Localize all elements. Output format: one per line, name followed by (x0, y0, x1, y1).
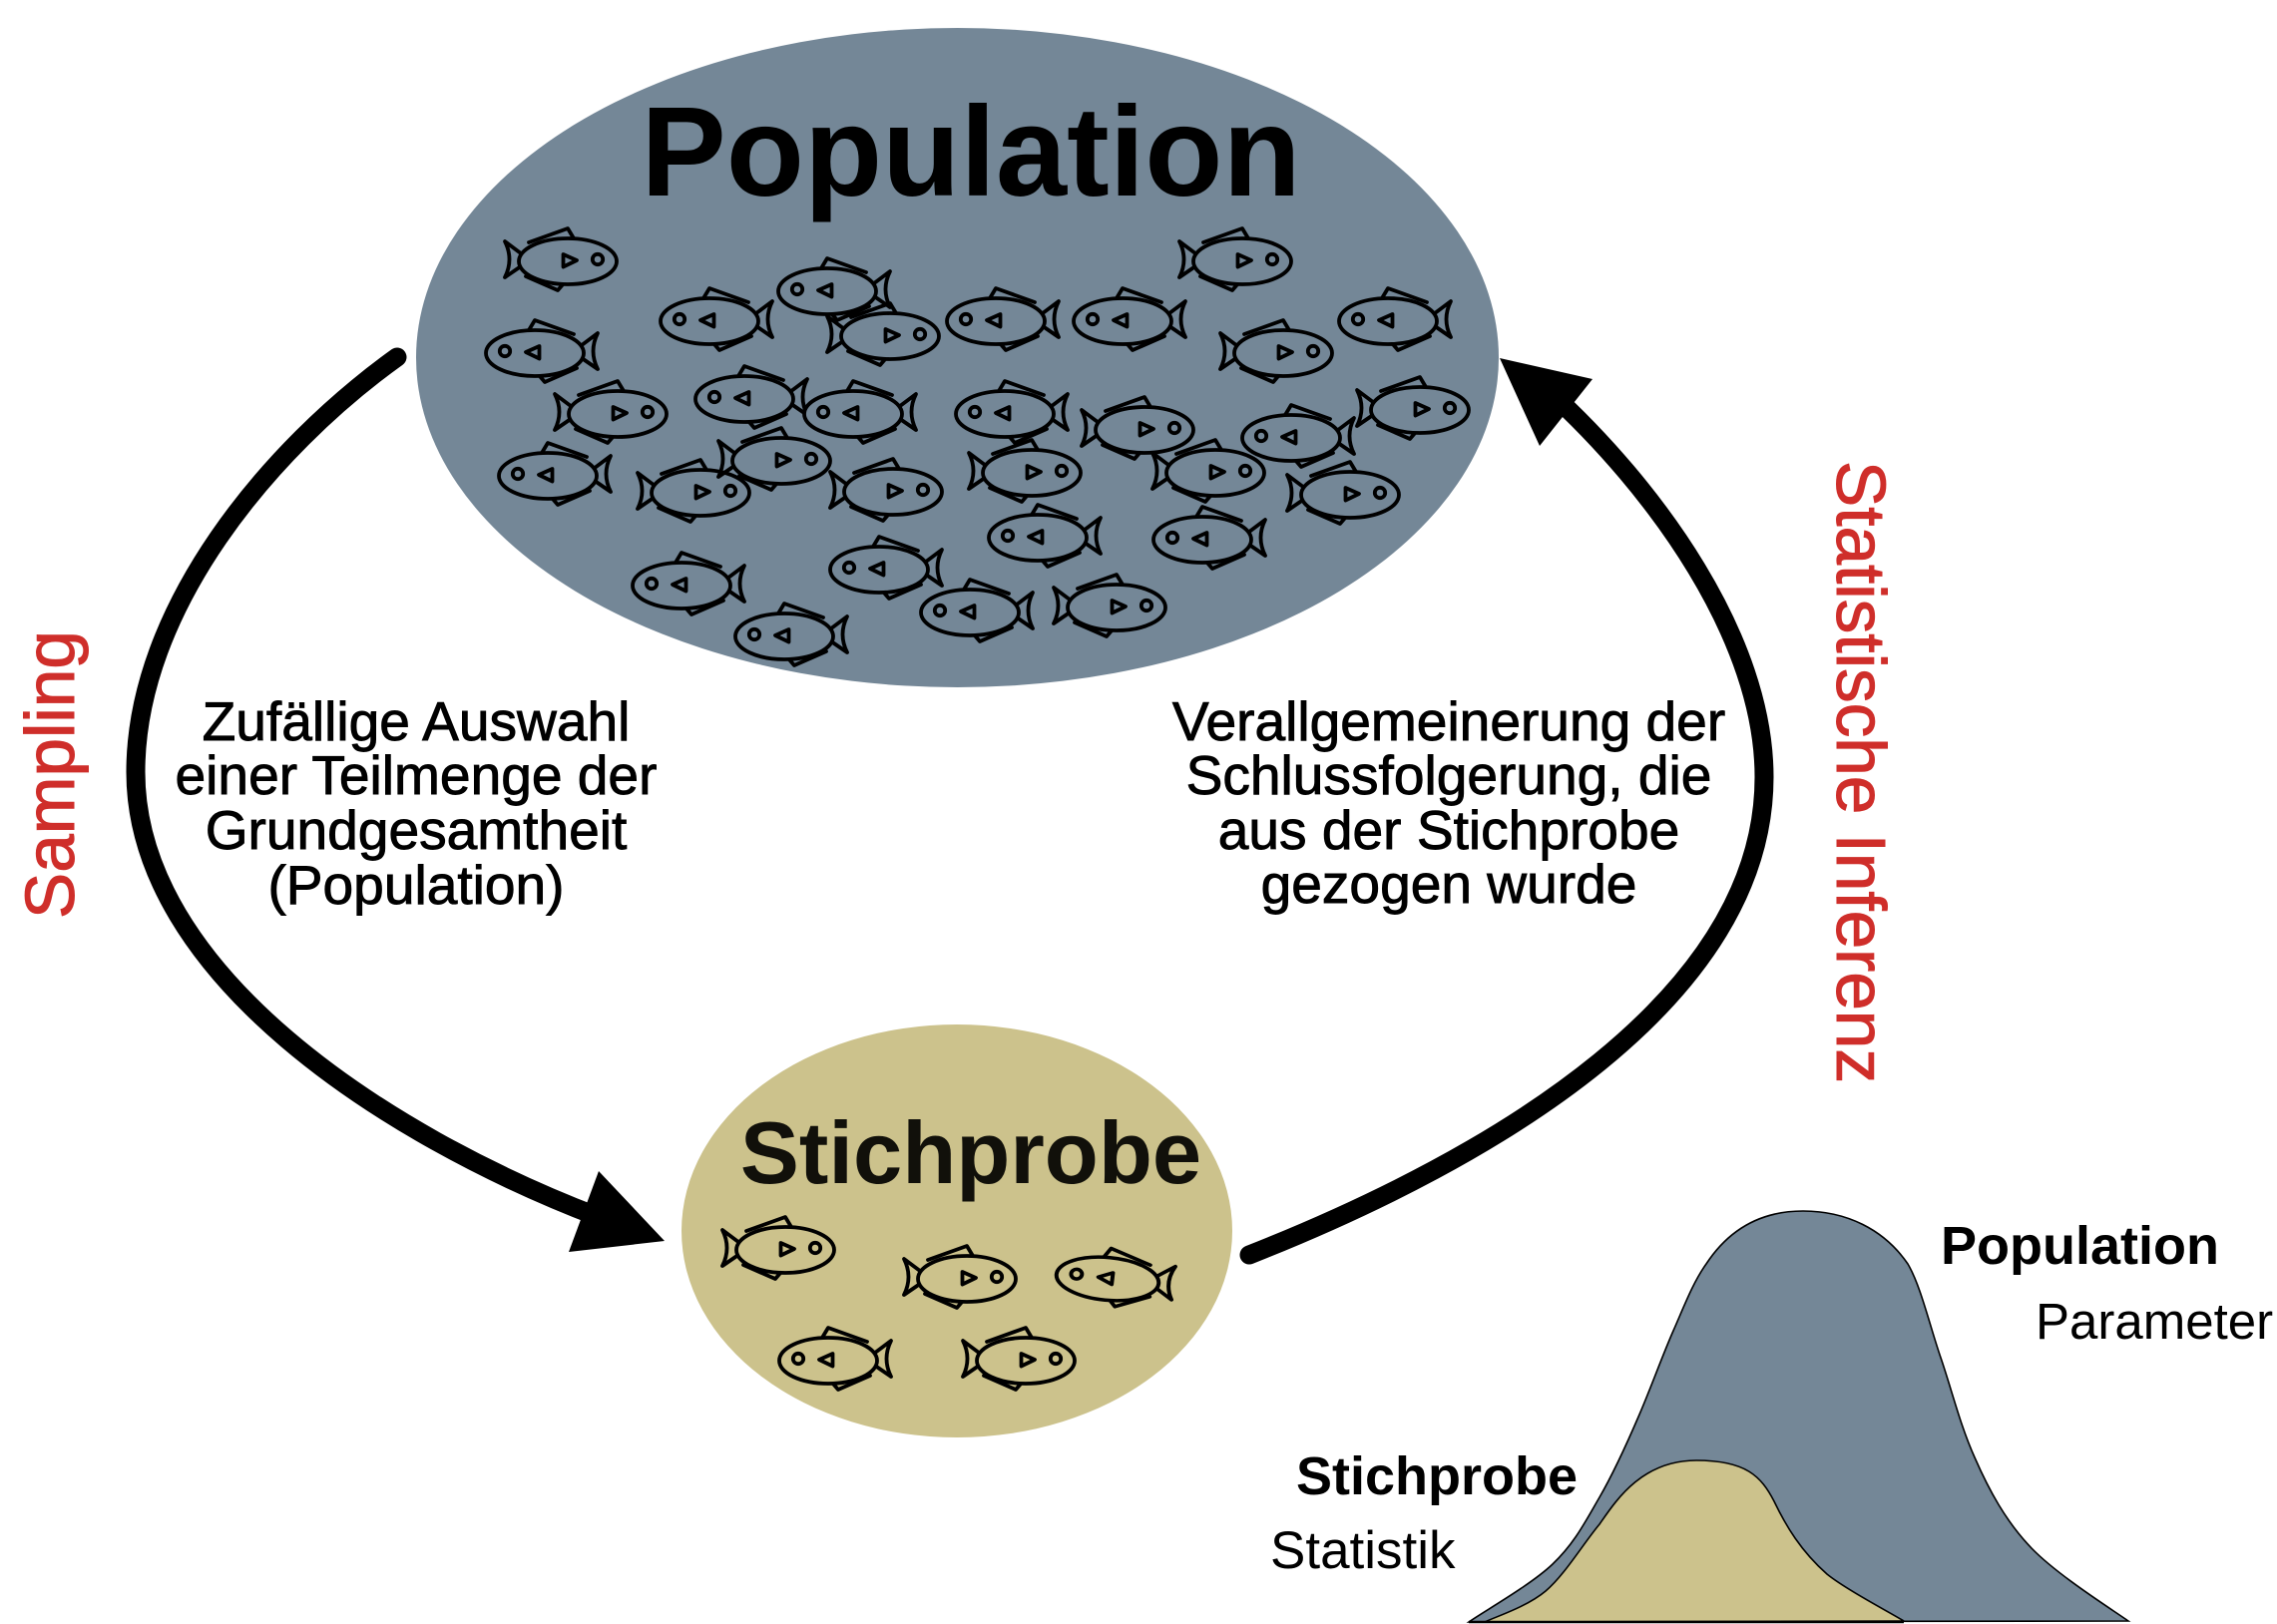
icon: fish (947, 288, 1059, 350)
text block: sampling description: Grundgesamtheit (206, 799, 627, 861)
icon: fish (1179, 228, 1291, 290)
icon: fish (1220, 320, 1332, 382)
label: Statistische Inferenz: Statistische Inferenz (1822, 461, 1900, 1083)
icon: fish (1074, 288, 1185, 350)
label: Stichprobe: Stichprobe (1296, 1446, 1578, 1506)
text block: inference description: aus der Stichprobe (1218, 799, 1679, 861)
icon: fish (904, 1246, 1016, 1308)
title: Population: Population (641, 81, 1301, 223)
icon: fish (499, 443, 611, 505)
panel: sample ellipse (682, 1024, 1232, 1437)
icon: fish (661, 288, 772, 350)
population ellipse shape (416, 28, 1499, 687)
text block: inference description: Schlussfolgerung, die (1186, 744, 1711, 806)
sample distribution curve (1485, 1460, 1904, 1622)
text block: inference description (1172, 690, 1725, 915)
text block: sampling description (176, 690, 657, 916)
icon: fish (1082, 397, 1193, 459)
icon: fish (1054, 575, 1165, 636)
icon: fish (735, 604, 847, 665)
icon: fish (555, 381, 667, 443)
icon: fish (963, 1328, 1075, 1390)
chart: distributions (1270, 1211, 2273, 1622)
icon: fish (1357, 377, 1469, 439)
fish school in population (486, 228, 1469, 665)
label: Statistik: Statistik (1270, 1521, 1456, 1580)
icon: fish (827, 303, 939, 365)
icon: fish (1152, 440, 1264, 502)
icon: fish (778, 258, 890, 320)
label: Sampling: Sampling (11, 630, 89, 919)
text block: sampling description: Zufällige Auswahl (203, 690, 630, 752)
icon: fish (1242, 405, 1354, 467)
icon: fish (718, 428, 830, 490)
icon: fish (1287, 462, 1399, 524)
icon: fish (921, 580, 1033, 641)
label: Parameter: Parameter (2036, 1293, 2273, 1350)
icon: fish (830, 537, 942, 599)
icon: fish (956, 381, 1068, 443)
icon: fish (1153, 507, 1265, 569)
population distribution curve (1469, 1211, 2128, 1622)
icon: fish (1339, 288, 1451, 350)
icon: fish (638, 460, 749, 522)
arrow: sampling (136, 357, 665, 1252)
text block: sampling description: (Population) (267, 854, 565, 916)
icon: fish (804, 381, 916, 443)
text block: inference description: Verallgemeinerung der (1172, 690, 1725, 752)
baseline (1469, 1621, 1904, 1623)
text block: inference description: gezogen wurde (1261, 853, 1636, 915)
icon: fish (633, 553, 744, 614)
icon: fish (722, 1217, 834, 1279)
title: Stichprobe: Stichprobe (740, 1103, 1201, 1202)
icon: fish (695, 366, 807, 428)
icon: fish (779, 1328, 891, 1390)
label: Population: Population (1941, 1216, 2219, 1276)
fish in sample (722, 1217, 1176, 1390)
arrow: statistical inference (1249, 358, 1764, 1255)
icon: fish (830, 459, 942, 521)
sample ellipse shape (682, 1024, 1232, 1437)
text block: sampling description: einer Teilmenge der (176, 744, 657, 806)
icon: fish (486, 320, 598, 382)
icon: fish (1054, 1244, 1176, 1312)
icon: fish (969, 440, 1081, 502)
icon: fish (989, 505, 1101, 567)
panel: population ellipse (416, 28, 1499, 687)
icon: fish (505, 228, 617, 290)
